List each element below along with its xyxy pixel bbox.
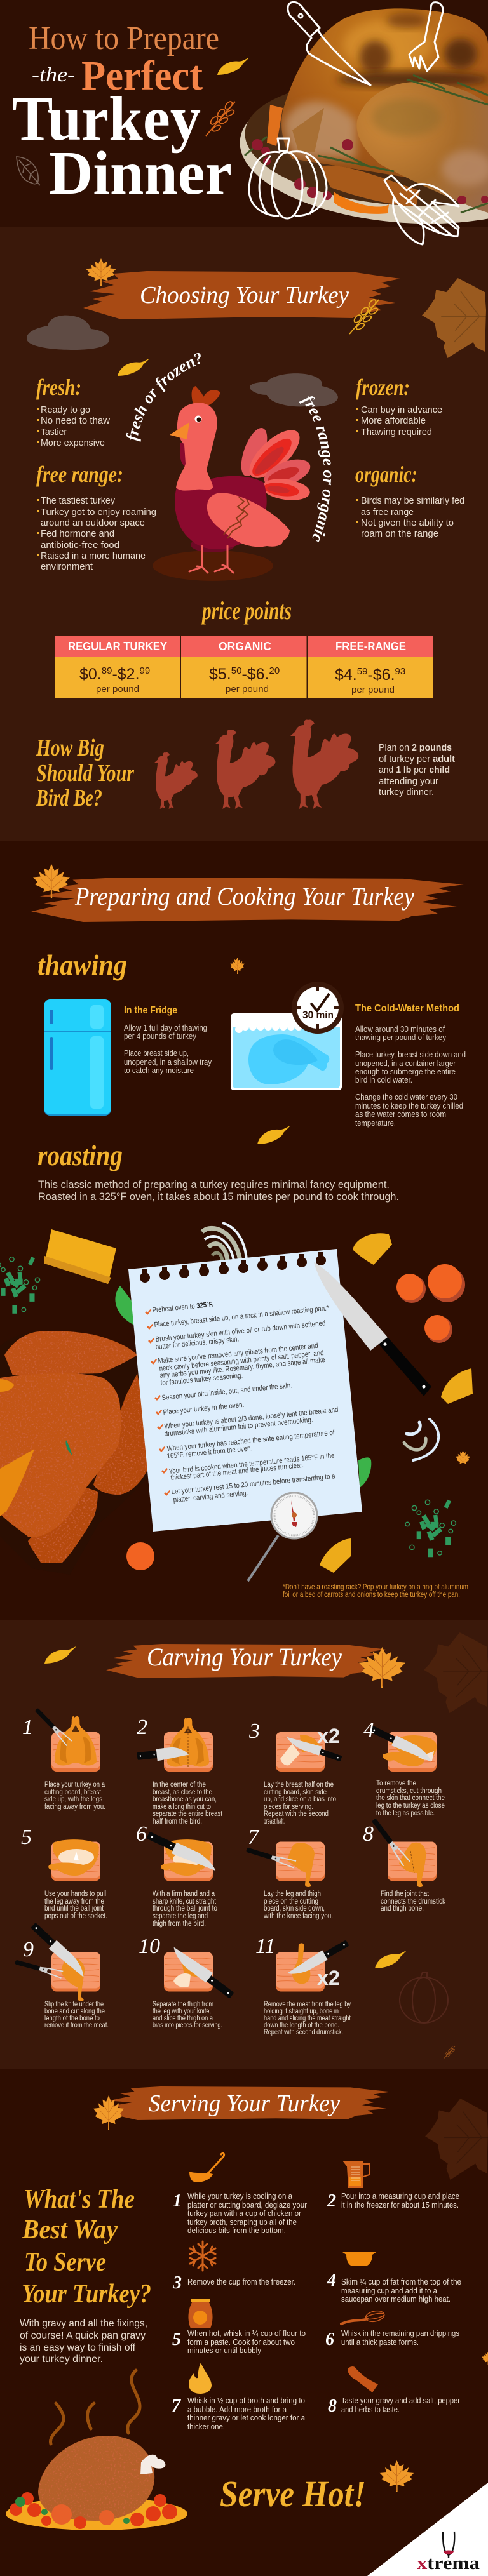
gravy step 4: 4 [327,2271,336,2290]
text: portion guidance [379,743,455,797]
illustration: roasted turkey [0,1331,152,1575]
text: gravy intro: of course! A quick pan gravy [20,2330,146,2341]
icon: outline leaf [17,157,40,185]
gravy step 3 [172,2241,295,2293]
text: roasting intro: This classic method of preparing a turkey requires minimal fancy equipment. [38,1178,390,1191]
step 8: and thigh bone. [381,1905,424,1912]
heading: roasting: roasting [37,1139,123,1171]
table: price points: FREE-RANGE [336,640,406,653]
heading: how big should your bird be: Should Your [36,760,135,787]
icon: 30 minute clock: 30 min [302,1009,334,1021]
text: cold-water method: The Cold-Water Method [355,1003,459,1014]
step 9: bone and cut along the [44,2008,105,2015]
logo: xtrema: xtrema [417,2554,480,2573]
section banner: Serving Your Turkey: Serving Your Turkey [149,2090,340,2117]
text: cold-water method [355,1003,466,1128]
gravy step 7 [172,2363,305,2431]
gravy step 7: thinner gravy or let cook longer for a [187,2413,305,2422]
list: frozen: Can buy in advance [361,405,442,415]
step 10: Separate the thigh from [152,2001,214,2008]
step 9: length of the bone to [44,2015,100,2022]
heading: free range: free range: [36,462,123,487]
text: in the fridge: In the Fridge [124,1005,177,1016]
gravy step 5: When hot, whisk in ¼ cup of flour to [187,2329,306,2338]
section banner: Preparing and Cooking: Preparing and Cooking Your Turkey [74,882,414,911]
gravy step 5: 5 [172,2330,181,2349]
table: price points: REGULAR TURKEY [68,640,167,653]
gravy step 4: measuring cup and add it to a [341,2286,437,2295]
icon: yellow leaf [118,359,149,376]
table: price points: 99 [140,665,150,676]
checklist text: butter for delicious, crispy skin. [155,1335,240,1351]
table: price points: -$2. [112,665,140,683]
icon: fridge [44,999,111,1116]
gravy step 6: until a thick paste forms. [341,2338,419,2347]
list: organic [356,496,464,539]
step 11: down the length of the bone. [264,2022,339,2029]
text: in the fridge: to catch any moisture [124,1065,194,1075]
heading: fresh: fresh: [36,375,81,400]
icon: chef knife [314,1262,431,1396]
text: in the fridge: Allow 1 full day of thawing [124,1023,207,1032]
list: organic: Not given the ability to [361,518,454,528]
list: free range: Turkey got to enjoy roaming [41,507,156,517]
step 10: and slice the thigh on a [152,2015,213,2022]
checklist text: drumsticks with aluminum foil to prevent overcooking. [164,1417,313,1438]
step 8: Find the joint that [381,1890,430,1898]
gravy step 1: platter or cutting board, deglaze your [187,2201,307,2210]
step 6: sharp knife, cut straight [152,1898,217,1905]
step 2: 2 [137,1716,147,1739]
section banner: Preparing and Cooking [31,878,464,922]
step 2 [137,1716,223,1825]
step 10: 10 [139,1935,160,1958]
step 8: connects the drumstick [381,1898,445,1905]
text: cold-water method: bird in cold water. [355,1075,412,1084]
icon: butter block [44,1229,116,1284]
gravy step 6: 6 [325,2330,334,2349]
icon: large turkey silhouette [290,719,358,809]
text: roasting intro: Roasted in a 325°F oven, it takes about 15 minutes per pound to cook through. [38,1191,399,1203]
step 4: the skin that connect the [376,1794,445,1802]
step 10: bias into pieces for serving. [152,2022,222,2029]
step 1: facing away from you. [44,1803,105,1811]
heading: what's the best way: To Serve [24,2248,106,2277]
step 5: the leg away from the [44,1898,104,1905]
text: cold-water method: Place turkey, breast side down and [355,1050,466,1059]
step 3: 3 [248,1719,260,1743]
heading: price points: price points [201,596,292,625]
gravy step 3: 3 [172,2273,182,2293]
text: cold-water method: Change the cold water every 30 [355,1092,458,1102]
curved label: fresh or frozen: fresh or frozen? [126,353,201,442]
icon: onion rings [404,1419,438,1460]
gravy step 1: turkey pan with a cup of chicken or [187,2209,301,2218]
checklist text: Season your bird inside, out, and under the skin. [161,1382,292,1402]
icon: yellow leaf [217,58,249,75]
step 3: Repeat with the second [264,1810,329,1818]
gravy step 2: Pour into a measuring cup and place [341,2192,459,2201]
icon: yellow leaf [257,1126,290,1144]
checklist text: Your bird is cooked when the temperature reads 165°F in the [168,1452,335,1476]
step 5: 5 [21,1825,32,1849]
table: price points: 20 [269,665,280,676]
step 2: half from the bird. [152,1818,202,1825]
illustration: turkey in cold water tub [231,1013,342,1090]
footnote: foil or a bed of carrots and onions to keep the turkey off the pan. [283,1591,460,1599]
step 5: bird until the ball joint [44,1905,104,1912]
checklist text: for fabulous turkey seasoning. [160,1372,243,1387]
gravy step 6 [325,2309,459,2349]
step 7: with the knee facing you. [263,1912,333,1920]
table: price points [55,636,433,698]
heading: how big should your bird be: Bird Be? [36,785,102,811]
table: price points: $5. [209,665,231,683]
step 9: remove it from the meat. [44,2022,109,2029]
text: cold-water method: as the water comes to room [355,1109,446,1119]
step 3: up, and slice on a bias into [264,1796,336,1803]
icon: green leaf left [115,1286,139,1326]
icon: small turkey silhouette [154,752,198,809]
section background: header [0,0,488,227]
heading: what's the best way: Best Way [22,2215,118,2245]
section background: preparing [0,841,488,1620]
step 9 [15,1921,109,2029]
icon: yellow sprig [349,298,379,334]
step 9: Slip the knife under the [44,2001,104,2008]
icon: faint pumpkin outline [400,1972,448,2023]
section banner: Serving Your Turkey [103,2086,391,2120]
gravy step 3: Remove the cup from the freezer. [187,2278,295,2286]
table: price points: per pound [96,684,139,695]
step 5: Use your hands to pull [44,1890,106,1898]
step 6: With a firm hand and a [152,1890,215,1898]
list: free range: antibiotic-free food [41,540,119,551]
step 1: 1 [22,1716,33,1739]
icon: yellow leaf [44,1646,76,1664]
list: free range: environment [41,562,93,572]
list: fresh: Tastier [41,427,67,437]
icon: thermometer [248,1493,317,1581]
table: price points: 59 [357,666,367,677]
icon: maple leaf [33,864,70,898]
icon: large brown leaf [422,278,486,358]
step 11: Repeat with second drumstick. [264,2029,343,2036]
text: cold-water method: temperature. [355,1118,396,1128]
icon: 30 minute clock [292,982,344,1034]
icon: dark large leaf serving [425,2099,488,2180]
step 3 [248,1719,343,1825]
gravy step 5: form a paste. Cook for about two [187,2338,295,2347]
step 10: the leg with your knife, [152,2008,211,2015]
heading: what's the best way: Your Turkey? [22,2279,151,2309]
step 11: holding it straight up, bone in [264,2008,339,2015]
list: free range [37,496,156,572]
panel: roasting checklist paper [128,1249,362,1532]
list: free range: around an outdoor space [41,518,145,528]
text: cold-water method: unopened, in a container larger [355,1058,456,1068]
icon: orange sprig [206,100,235,136]
step 2: make a long thin cut to [152,1803,211,1811]
checklist text: When your turkey has reached the safe eating temperature of [166,1429,336,1453]
table: price points: ORGANIC [219,640,271,653]
title [12,20,232,208]
icon: steam [51,2370,140,2444]
title: -the- [32,63,75,86]
gravy step 7: thicker one. [187,2422,225,2431]
list: free range: Fed hormone and [41,529,114,539]
checklist text: 165°F, remove it from the oven. [166,1445,253,1460]
icon: yellow leaf [375,1951,407,1968]
step 2: breastbone as you can, [152,1796,217,1803]
table: price points: per pound [351,684,395,695]
heading: how big should your bird be: How Big [36,735,104,761]
text: gravy intro: With gravy and all the fixings, [20,2318,147,2329]
gravy step 2: it in the freezer for about 15 minutes. [341,2201,459,2210]
gravy step 7: 7 [172,2396,181,2416]
step 6 [136,1822,219,1928]
step 1 [22,1707,105,1811]
list: free range: Raised in a more humane [41,551,146,561]
text: cold-water method: thawing per pound of turkey [355,1032,446,1042]
table: price points: $0. [79,665,102,683]
gravy step 4 [327,2252,461,2304]
text: cold-water method: Allow around 30 minutes of [355,1024,445,1034]
step 11 [255,1935,351,2036]
table: price points: per pound [226,684,269,695]
list: fresh: Ready to go [41,405,90,415]
text: portion guidance: Plan on 2 pounds [379,743,452,753]
gravy step 7: a bubble. Add more broth for a [187,2405,287,2414]
list: free range: The tastiest turkey [41,496,116,506]
checklist text: Brush your turkey skin with olive oil or rub down with softened [155,1319,326,1344]
gravy step 1: 1 [173,2191,182,2211]
step 7: piece on the cutting [264,1898,318,1905]
step 8: 8 [363,1822,374,1846]
list: frozen: More affordable [361,416,426,426]
step 4: 4 [363,1718,374,1742]
gravy step 1: turkey broth, scraping up all of the [187,2218,297,2227]
list: frozen: Thawing required [361,427,432,437]
table: price points: -$6. [241,665,269,683]
table: price points: -$6. [367,666,395,684]
checklist text [152,1301,339,1504]
gravy step 4: Skim ¼ cup of fat from the top of the [341,2278,461,2286]
text: in the fridge: per 4 pounds of turkey [124,1031,196,1041]
step 4 [363,1718,445,1817]
checklist check marks [145,1309,170,1496]
logo: xtrema [417,2532,480,2573]
gravy step 5: minutes or until bubbly [187,2346,262,2355]
list: organic: Birds may be similarly fed [361,496,464,506]
list: fresh: No need to thaw [41,416,111,426]
checklist text: any herbs you may like. Rosemary, thyme, and sage all make [159,1356,325,1380]
section banner: Choosing Your Turkey: Choosing Your Turkey [140,282,349,309]
checklist text: When your turkey is about 2/3 done, loosely tent the breast and [164,1406,339,1431]
icon: small maple leaf [230,958,245,974]
icon: carrot slices [126,1264,465,1570]
list: organic: roam on the range [361,529,438,539]
text: cold-water method: enough to submerge the entire [355,1067,456,1076]
corner: white logo triangle [367,2483,488,2576]
icon: maple leaf at right edge [482,2352,488,2365]
title: How to Prepare [29,20,219,57]
section background: serving [0,2069,488,2576]
icon: white line-art corn [384,175,459,244]
icon: white line-art fork [409,3,443,71]
list: fresh [37,405,111,448]
heading: how big should your bird be [36,735,135,811]
step 3: cutting board, skin side [264,1789,327,1796]
icon: white line-art pumpkin [249,138,327,218]
title: Turkey [12,83,201,154]
text: gravy intro: your turkey dinner. [20,2354,103,2365]
gravy step 5 [172,2299,306,2355]
step 9: 9 [23,1938,34,1961]
step 8 [363,1817,445,1912]
callout: Serve Hot: Serve Hot! [220,2473,366,2514]
step 6: through the ball joint to [152,1905,217,1912]
step 1: cutting board, breast [44,1789,102,1796]
text: cold-water method: minutes to keep the turkey chilled [355,1101,463,1111]
checklist text: Preheat oven to 325°F. [152,1301,214,1314]
step 3: Lay the breast half on the [264,1781,334,1789]
step 2: In the center of the [152,1781,206,1789]
step 3: pieces for serving. [264,1803,313,1811]
step 6: thigh from the bird. [152,1920,206,1928]
step 2: separate the entire breast [152,1810,223,1818]
step 4: to the leg as possible. [376,1810,435,1817]
footnote [283,1584,468,1599]
step 3: breast half. [264,1818,285,1825]
gravy step 7: Whisk in ½ cup of broth and bring to [187,2396,305,2405]
step 4: leg to the turkey as close [376,1802,445,1810]
step 1: side up, with the legs [44,1796,102,1803]
section background: carving [0,1620,488,2069]
icon: small sprig [444,2046,455,2059]
icon: maple leaf [86,258,116,286]
checklist text: Let your turkey rest 15 to 20 minutes before transferring to a [171,1472,336,1496]
step 11: Remove the meat from the leg by [264,2001,351,2008]
step 7 [245,1825,333,1920]
list: organic: as free range [361,507,414,517]
gravy step 8: 8 [328,2396,337,2416]
step 7: 7 [248,1825,260,1849]
step 11: x2 [317,1966,340,1989]
icon: chives right [405,1500,456,1557]
icon: onion slice [202,1223,247,1278]
gravy step 2 [327,2161,459,2211]
section banner: Choosing Your Turkey [83,271,400,319]
step 4: drumsticks, cut through [376,1787,442,1795]
step 11: hand and slicing the meat straight [264,2015,351,2022]
step 7: Lay the leg and thigh [264,1890,321,1898]
text: portion guidance: and 1 lb per child [379,765,450,775]
step 2: breast, as close to the [152,1789,212,1796]
icon: white line-art knife [288,2,370,85]
gravy step 2: 2 [327,2191,336,2211]
title: Perfect [81,53,203,99]
icon: chives left [0,1257,40,1314]
heading: frozen: frozen: [356,375,410,400]
header photo: roast turkey on a plate [235,8,488,234]
gravy step 8 [328,2366,460,2416]
text: portion guidance: attending your [379,777,438,787]
gravy step 8: and herbs to taste. [341,2405,400,2414]
table: price points: 93 [395,666,405,677]
icon: medium turkey silhouette [215,730,275,809]
text: gravy intro [20,2318,147,2365]
icon: maple leaf [359,1647,405,1688]
table: price points: $4. [335,666,357,684]
icon: maple leaf [379,2460,414,2492]
checklist text: neck cavity before seasoning with plenty of salt, pepper, and [159,1349,324,1373]
icon: potato wedges [320,1233,473,1573]
list: fresh: More expensive [41,438,105,448]
text: portion guidance: turkey dinner. [379,787,434,797]
checklist text: Make sure you've removed any giblets from the center and [158,1342,318,1365]
text: in the fridge: Place breast side up, [124,1048,189,1058]
step 6: separate the leg and [152,1912,208,1920]
table: price points: 89 [102,665,112,676]
icon: green leaf right [358,1457,371,1488]
step 10 [139,1935,236,2029]
heading: thawing: thawing [37,949,127,981]
checklist text: Place your turkey in the oven. [163,1401,245,1417]
gravy step 4: saucepan over medium high heat. [341,2295,451,2304]
illustration: cartoon turkey [152,386,314,581]
step 11: 11 [255,1935,275,1958]
icon: small maple leaf [456,1450,470,1467]
gravy step 1: While your turkey is cooling on a [187,2192,292,2201]
text: gravy intro: is an easy way to finish off [20,2342,136,2353]
gravy step 6: Whisk in the remaining pan drippings [341,2329,459,2338]
list: frozen [356,405,442,437]
gravy step 1 [173,2153,307,2235]
step 5: pops out of the socket. [44,1912,107,1920]
step 4: To remove the [376,1780,416,1787]
heading: organic: organic: [355,462,417,487]
text: roasting intro [38,1178,399,1203]
heading: what's the best way [22,2185,151,2309]
step 7: board, skin side down, [264,1905,325,1912]
icon: maple leaf [93,2095,124,2130]
checklist text: platter, carving and serving. [173,1490,248,1504]
table: price points: 50 [231,665,241,676]
icon: gray cloud right [250,373,338,406]
section banner: Carving Your Turkey [106,1643,386,1678]
section banner: Carving Your Turkey: Carving Your Turkey [147,1643,342,1671]
step 5 [21,1825,107,1920]
step 6: 6 [136,1822,147,1846]
icon: gray cloud left [27,316,109,350]
heading: what's the best way: What's The [24,2185,135,2214]
checklist text: Place turkey, breast side up, on a rack in a shallow roasting pan.* [154,1305,329,1329]
step 1: Place your turkey on a [44,1781,105,1789]
step 3: x2 [317,1725,340,1747]
checklist text: thickest part of the meat and the juices run clear. [170,1462,304,1482]
text: in the fridge: unopened, in a shallow tray [124,1057,212,1067]
text: portion guidance: of turkey per adult [379,754,455,764]
title: Dinner [49,139,232,208]
gravy step 8: Taste your gravy and add salt, pepper [341,2396,460,2405]
illustration: turkey on platter [6,2436,187,2530]
text: in the fridge [124,1005,212,1075]
icon: dark large leaf carving [424,1632,488,1713]
gravy step 1: delicious bits from the bottom. [187,2226,286,2235]
section background: choosing [0,227,488,841]
